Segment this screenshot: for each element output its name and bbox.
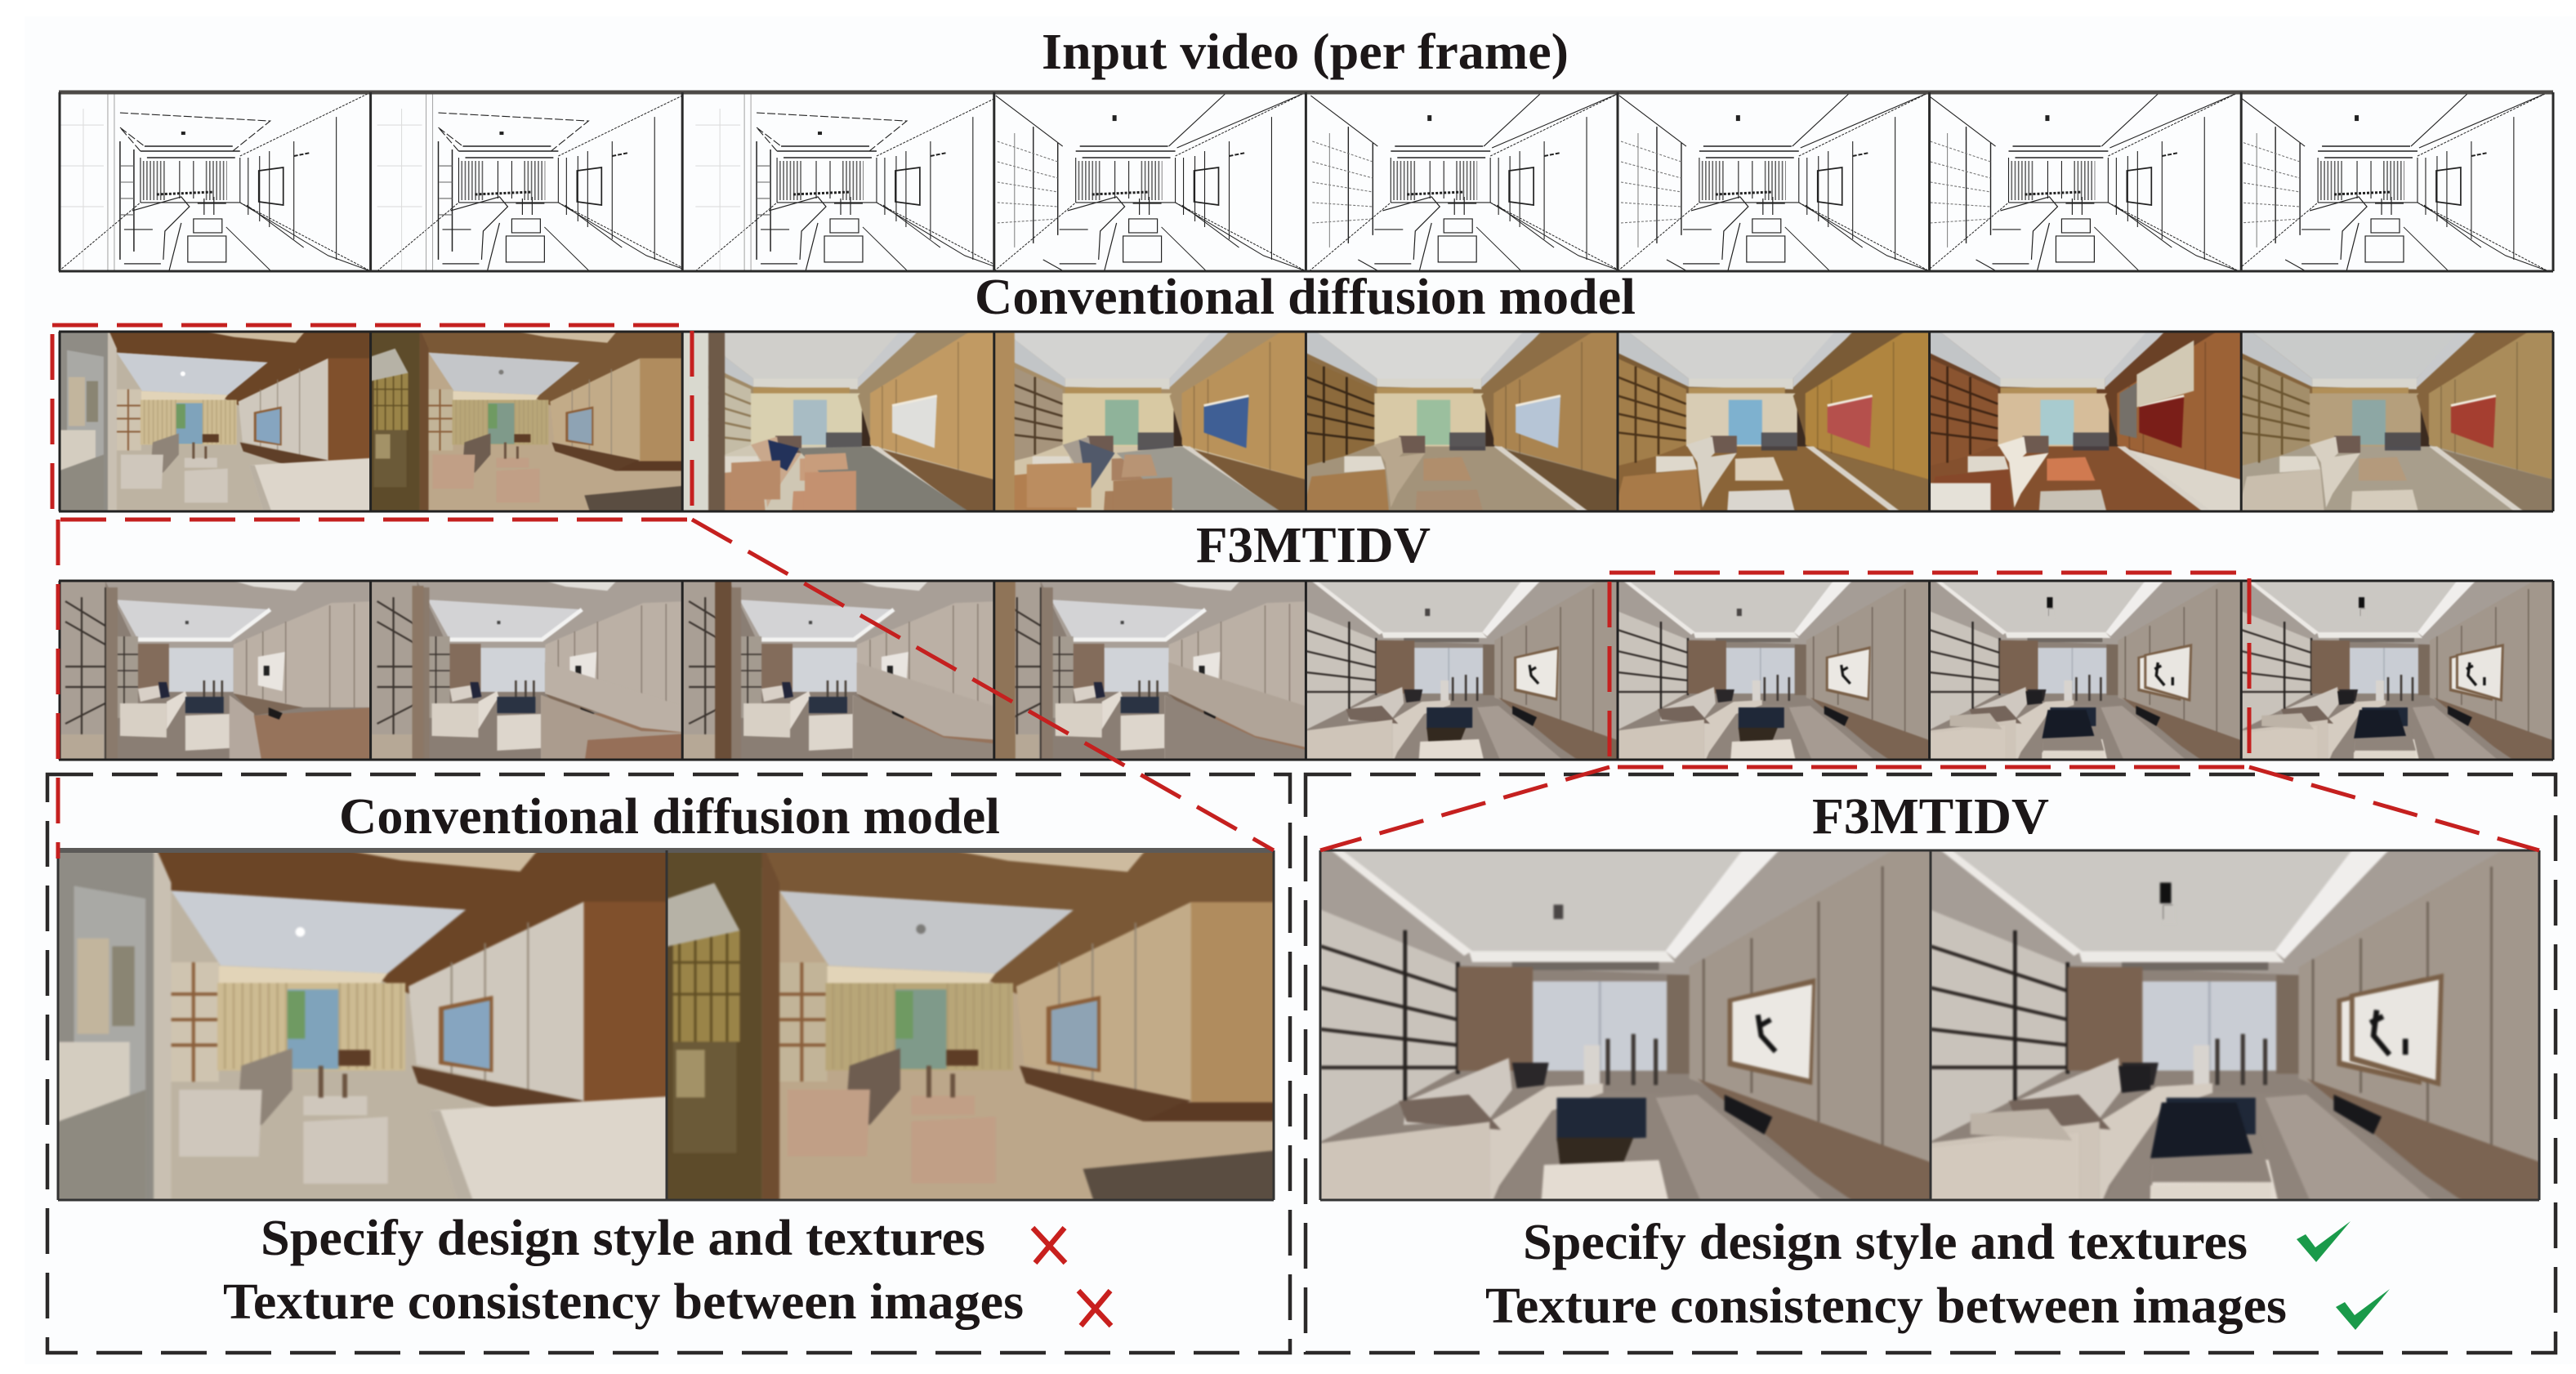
enlarged frames <box>1312 842 2547 1208</box>
panel: F3MTIDV detail <box>1306 774 2556 1353</box>
icon: red cross <box>1033 1228 1065 1263</box>
criterion: design style: Specify design style and textures <box>261 1211 985 1266</box>
icon: red cross <box>1078 1291 1111 1326</box>
heading: conventional diffusion model row: Conventional diffusion model <box>975 270 1636 325</box>
title: input video row: Input video (per frame) <box>1042 25 1569 80</box>
heading: F3MTIDV <box>1812 789 2049 845</box>
panel: conventional diffusion model detail <box>47 774 1290 1353</box>
heading: Conventional diffusion model <box>339 789 1000 845</box>
enlarged frames <box>50 843 1282 1207</box>
criterion: texture consistency: Texture consistency between images <box>223 1274 1024 1330</box>
row: sketch input frames <box>59 92 2553 271</box>
callout: red zoom box on F3MTIDV frames <box>1320 573 2539 850</box>
criterion: design style: Specify design style and textures <box>1523 1215 2248 1270</box>
row: F3MTIDV frames <box>55 577 2557 764</box>
heading: F3MTIDV row: F3MTIDV <box>1196 518 1431 573</box>
icon: green check <box>2336 1289 2390 1330</box>
icon: green check <box>2297 1221 2351 1262</box>
panel border <box>1306 774 2556 1353</box>
callout: red zoom box on conventional frames <box>52 325 1274 859</box>
criterion: texture consistency: Texture consistency between images <box>1485 1278 2287 1334</box>
row: conventional diffusion model frames <box>55 328 2557 515</box>
panel border <box>47 774 1290 1353</box>
